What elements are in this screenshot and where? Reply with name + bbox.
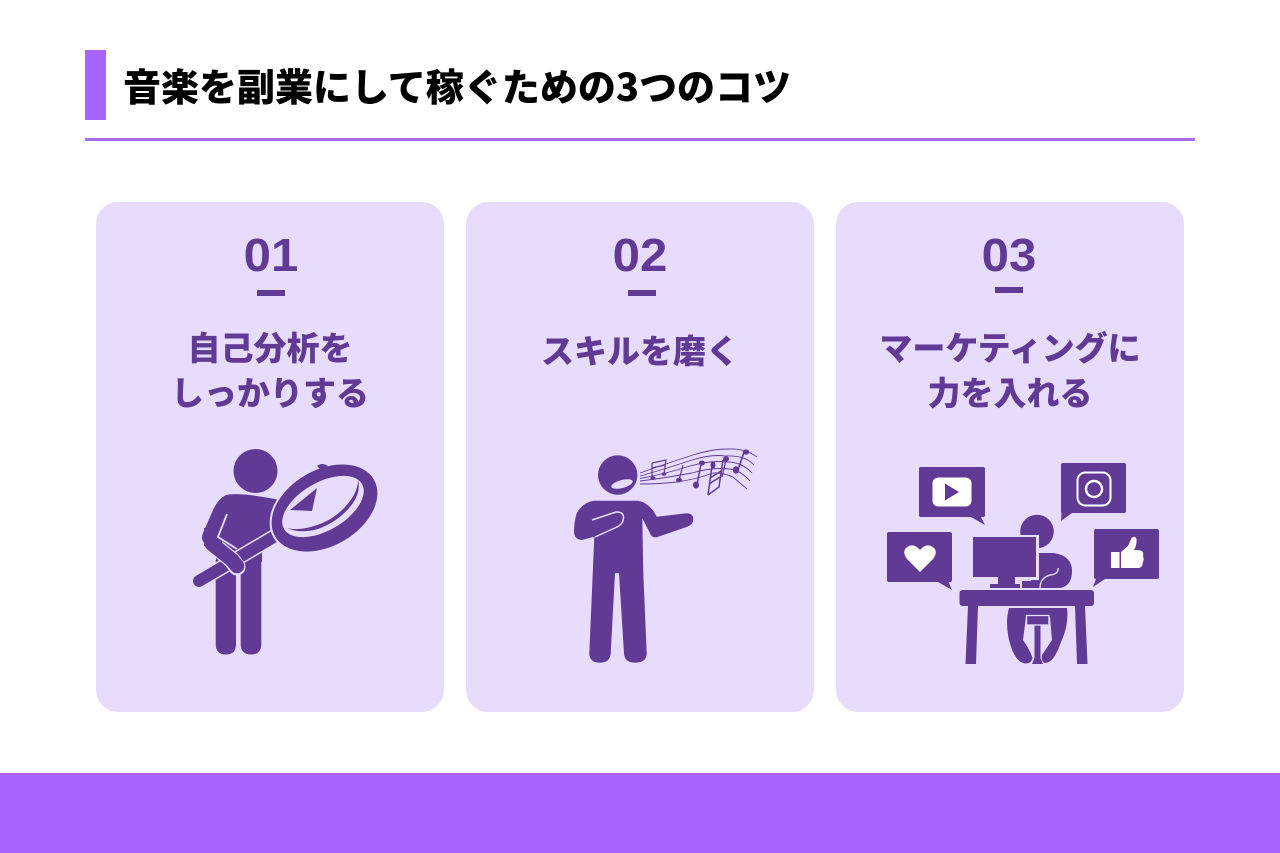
youtube bubble <box>919 467 985 525</box>
person torso <box>1030 553 1072 588</box>
handle <box>199 535 277 581</box>
shoulder seen through lens <box>290 488 317 511</box>
heading 1 <box>171 322 369 415</box>
thumbs up bubble <box>1093 529 1159 587</box>
heading 3 <box>879 322 1141 415</box>
lens glare crescent <box>287 480 359 531</box>
panel: card 1 <box>96 202 444 712</box>
singer body <box>574 501 693 663</box>
dash 3 <box>995 287 1023 293</box>
dash 1 <box>257 290 285 296</box>
heading 2: スキルを磨く <box>541 325 739 373</box>
footer band <box>0 773 1280 853</box>
heading 3: 力を入れる <box>928 367 1092 415</box>
chair <box>1027 616 1048 664</box>
legs <box>216 550 261 654</box>
staff lines <box>640 449 757 489</box>
legs <box>1007 608 1067 663</box>
number 02: 02 <box>613 229 667 281</box>
panel: card 2 <box>466 202 814 712</box>
singer head <box>598 455 637 495</box>
arm outline <box>592 512 624 537</box>
heading 1: しっかりする <box>171 367 369 415</box>
panel: card 3 <box>836 202 1184 712</box>
arm gap <box>218 514 237 549</box>
heading 1: 自己分析を <box>188 322 352 370</box>
instagram bubble <box>1061 463 1126 521</box>
heart bubble <box>887 532 952 590</box>
title accent bar <box>85 50 106 120</box>
music notes <box>650 449 749 495</box>
number 01: 01 <box>244 229 298 281</box>
monitor <box>972 535 1039 580</box>
head <box>234 449 278 493</box>
mouth <box>610 477 634 491</box>
desk <box>960 590 1094 606</box>
magnifier <box>253 444 396 572</box>
torso and arm <box>202 494 280 562</box>
person head <box>1020 515 1054 548</box>
heading 3: マーケティングに <box>879 322 1141 370</box>
hand <box>212 544 237 567</box>
dash 2 <box>628 290 656 296</box>
number 03: 03 <box>982 229 1036 281</box>
title: 音楽を副業にして稼ぐための3つのコツ <box>123 57 791 112</box>
title underline <box>85 138 1195 141</box>
